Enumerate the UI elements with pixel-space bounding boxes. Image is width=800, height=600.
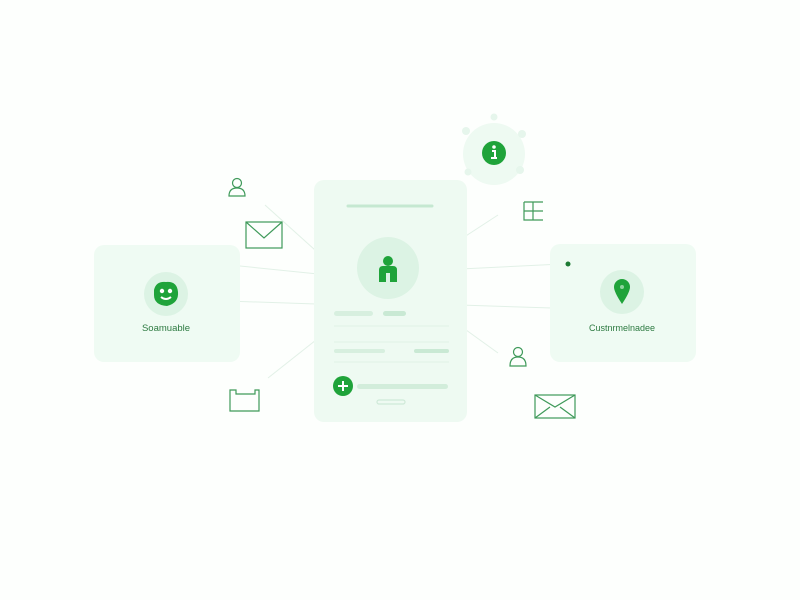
icon: person right [510,348,526,366]
icon: envelope right [535,395,575,418]
icon: location pin [600,270,644,314]
dot [566,262,570,266]
panel: right card [550,244,696,362]
icon: envelope left [246,222,282,248]
panel: left card [94,245,240,362]
label: left card: Soamuable [142,323,190,334]
icon: info badge [462,114,526,185]
icon: people [357,237,419,299]
panel: central phone card [314,180,467,422]
label: right card: Custnrmelnadee [589,323,655,333]
icon: box [230,390,259,411]
content rows [334,311,449,362]
icon: add button [333,376,448,396]
connector lines [226,205,562,378]
icon: left badge [144,272,188,316]
icon: person top-left [229,178,245,196]
icon: grid [524,202,543,220]
